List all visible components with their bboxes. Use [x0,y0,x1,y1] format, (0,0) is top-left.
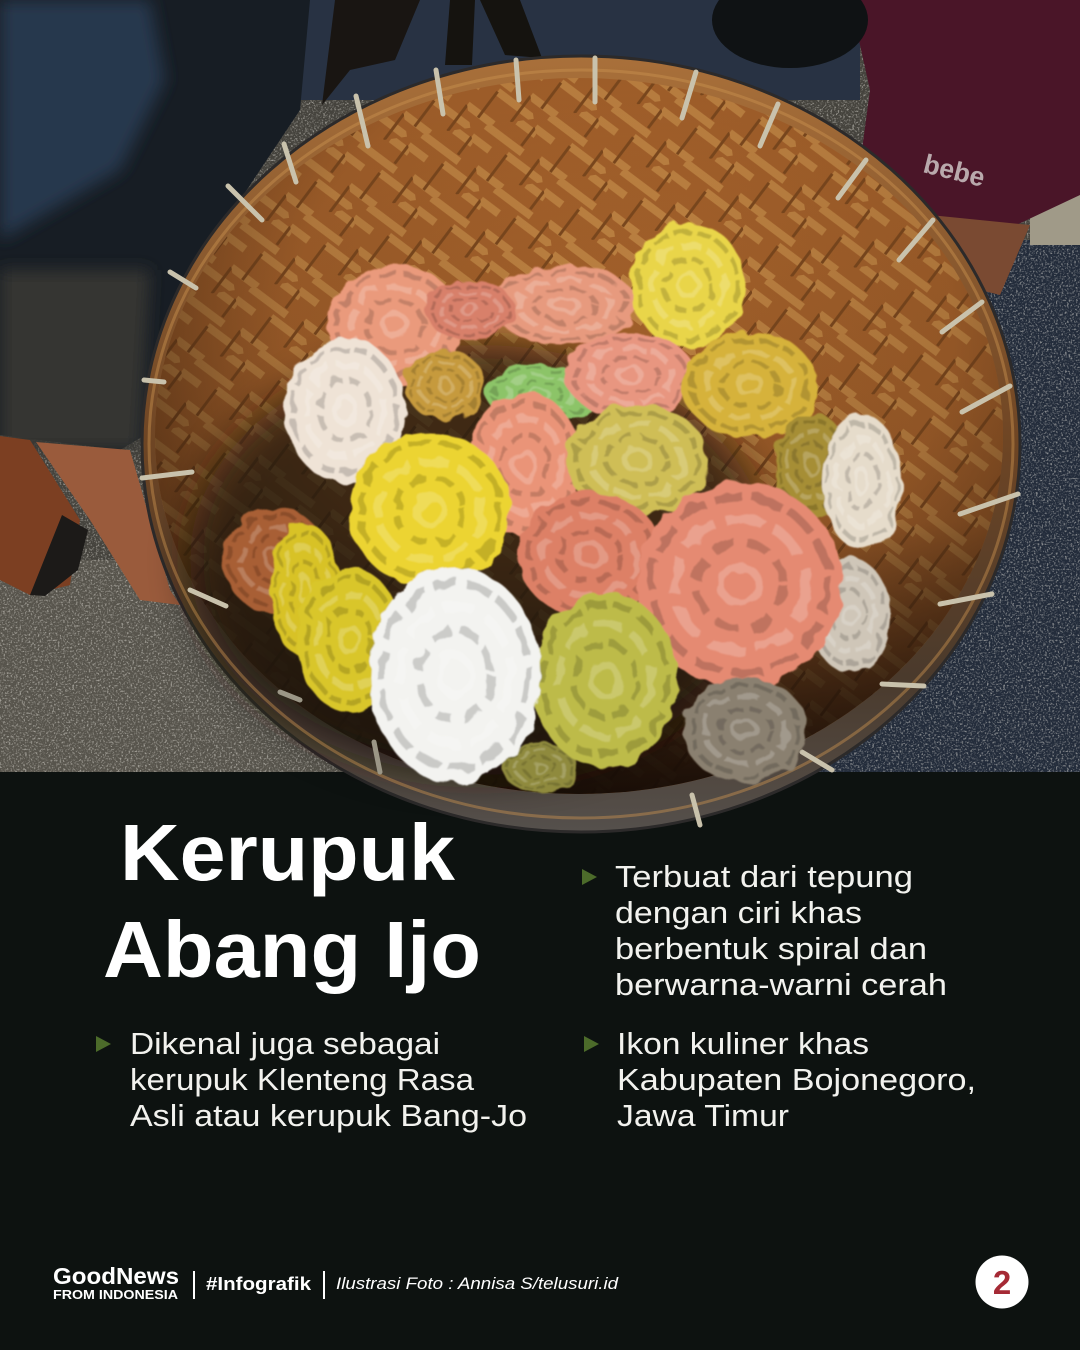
bullet marker [582,869,597,885]
bullet: made from flour [582,859,947,1002]
colourful spiral crackers [222,222,902,793]
logo [53,1263,179,1302]
bullet: also known as: Asli atau kerupuk Bang-Jo [130,1098,527,1133]
hashtag: #Infografik [206,1273,312,1294]
bullet: made from flour: Terbuat dari tepung [615,859,913,894]
bullet: made from flour: berbentuk spiral dan [615,931,927,966]
maroon cloth [850,0,1080,228]
bullet: culinary icon [584,1026,976,1133]
title: Kerupuk [120,808,456,897]
bullet: culinary icon: Kabupaten Bojonegoro, [617,1062,976,1097]
bullet: also known as: kerupuk Klenteng Rasa [130,1062,475,1097]
bullet: also known as [96,1026,527,1133]
bullet: culinary icon: Jawa Timur [617,1098,789,1133]
rim lashings [142,58,1018,825]
title [103,808,481,994]
page number badge: 2 [993,1264,1011,1301]
page number badge [976,1256,1028,1308]
woven bamboo basket [142,56,1020,832]
photo background: pavement, clothing and feet [0,0,1080,775]
photo credit: Ilustrasi Foto : Annisa S/telusuri.id [336,1274,619,1293]
dark blue clothing [0,0,310,450]
logo: FROM INDONESIA [53,1288,178,1302]
bullet marker [584,1036,599,1052]
logo: GoodNews [53,1263,179,1289]
dark bottom panel [0,772,1080,1350]
footer [53,1263,619,1302]
bullet: culinary icon: Ikon kuliner khas [617,1026,869,1061]
photo background: pavement, clothing and feet: bebe [921,149,988,193]
bullet: made from flour: dengan ciri khas [615,895,862,930]
bullet: also known as: Dikenal juga sebagai [130,1026,440,1061]
title: Abang Ijo [103,905,481,994]
chair legs [322,0,420,105]
bullet marker [96,1036,111,1052]
bullet: made from flour: berwarna-warni cerah [615,967,947,1002]
legs and sandals [0,436,80,595]
